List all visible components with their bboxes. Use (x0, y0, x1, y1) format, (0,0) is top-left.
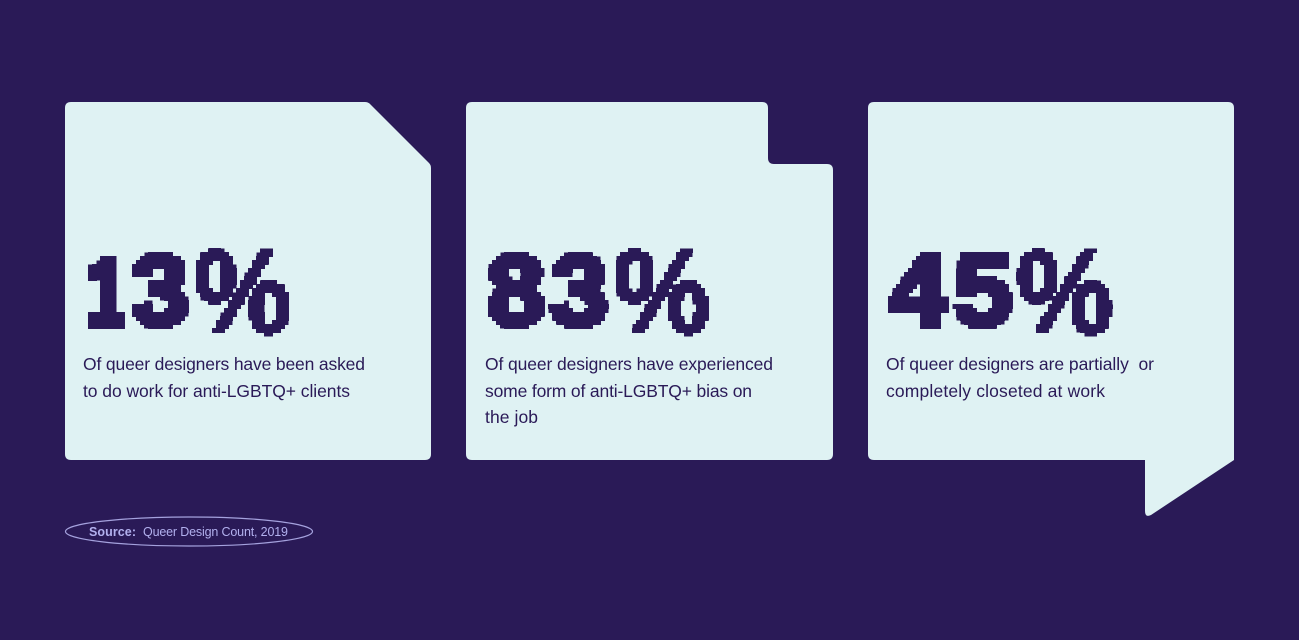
panel: 83% statistic (466, 102, 833, 460)
description text: the job (485, 407, 538, 427)
description text: to do work for anti-LGBTQ+ clients (83, 381, 350, 401)
number: 13%: 1 (85, 239, 127, 356)
number: 13%: 3 (131, 235, 189, 347)
source note in ellipse (66, 517, 312, 546)
description text: some form of anti-LGBTQ+ bias on (485, 381, 752, 401)
number: 13%: % (194, 226, 291, 359)
card shape with diagonal cut corner (65, 102, 431, 460)
card shape with square notch (466, 102, 833, 460)
description text: Of queer designers have experienced (485, 354, 773, 374)
number: 13% (85, 226, 291, 359)
number: 83%: 3 (550, 235, 608, 347)
number: 45% (889, 226, 1113, 359)
card shape with speech bubble tail (868, 102, 1234, 516)
description text: Of queer designers have been asked (83, 354, 365, 374)
number: 83%: 8 (487, 235, 545, 347)
panel: 13% statistic (65, 102, 431, 460)
description text: completely closeted at work (886, 381, 1105, 401)
number: 45%: 5 (954, 235, 1012, 347)
ellipse outline (66, 517, 312, 546)
number: 45%: 4 (889, 235, 948, 347)
number: 83%: % (613, 226, 710, 359)
description text: Of queer designers are partially or (886, 354, 1154, 374)
panel: 45% statistic (0, 0, 1234, 516)
source label: Source: (89, 525, 136, 539)
number: 45%: % (1016, 226, 1113, 359)
number: 83% (487, 226, 710, 359)
source name: Queer Design Count, 2019 (143, 525, 288, 539)
